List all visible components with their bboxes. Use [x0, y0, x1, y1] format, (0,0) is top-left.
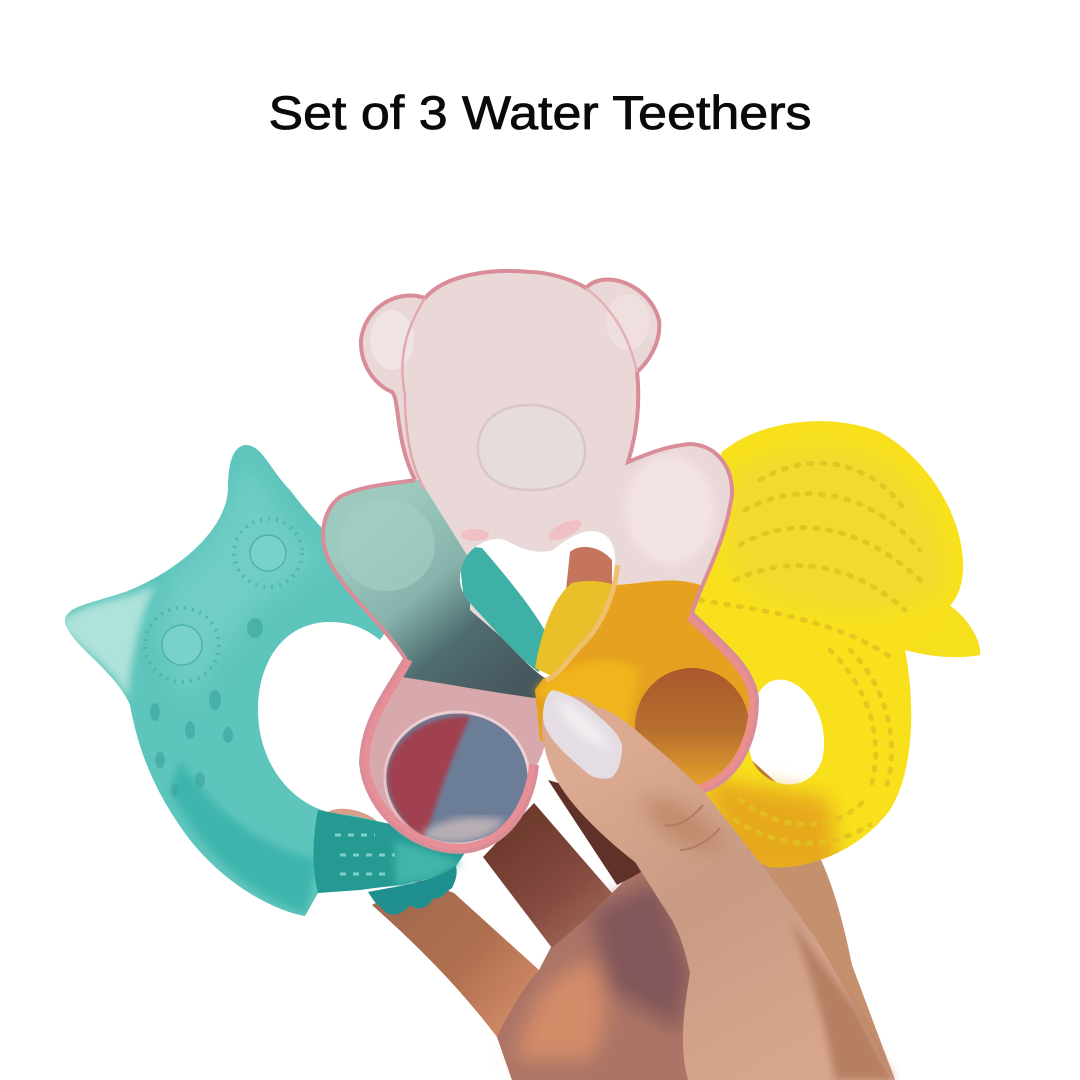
pink bear teether [300, 271, 770, 860]
teal owl teether [60, 445, 470, 916]
orange palm highlight [515, 960, 605, 1060]
nail highlight [556, 700, 612, 750]
brighter orange around the nail [532, 659, 639, 724]
embossed dots on duck [700, 463, 925, 843]
clear lens of right foot [635, 668, 749, 784]
first finger [372, 880, 600, 1080]
yellow duck edge visible through the heart [535, 581, 615, 680]
thumb [542, 696, 894, 1080]
scalloped fin [368, 866, 457, 914]
embossed band texture [335, 835, 395, 874]
embossed dots [150, 618, 263, 797]
embossed sun: top [234, 519, 302, 587]
right ear highlight [606, 294, 650, 350]
lower curved band [170, 760, 318, 913]
yellow duck teether [694, 421, 980, 868]
duck body [640, 421, 980, 867]
bear snout [478, 405, 585, 490]
ear highlights [370, 310, 414, 370]
left arm emboss [348, 511, 435, 591]
knuckle creases [665, 805, 720, 850]
fingertip behind teal band [328, 809, 378, 822]
duck beak [905, 606, 980, 657]
fingertip behind the heart [566, 547, 612, 590]
thumb with painted nail [542, 690, 894, 1080]
right back finger [760, 860, 895, 1080]
inner head line [402, 298, 425, 490]
owl body [65, 445, 470, 916]
heart-edge orange inner curve [545, 565, 615, 678]
red part of the lens [388, 716, 470, 838]
orange lower right [535, 580, 749, 785]
light right side of band [395, 840, 462, 885]
purple palm shadow [590, 880, 690, 1030]
right arm highlight [628, 458, 712, 562]
finger seen through duck hole [735, 745, 790, 810]
teal strip visible through the heart [458, 545, 550, 672]
second notch highlight [548, 520, 582, 540]
bear outline [323, 271, 757, 852]
clear lens of left foot [385, 712, 529, 844]
head shading [723, 445, 946, 612]
third finger [548, 780, 645, 885]
thick pink rim on the left foot [361, 658, 537, 852]
body highlight [162, 474, 312, 688]
thumb right-side shading [790, 920, 894, 1080]
thumb joint shadow [640, 798, 730, 853]
palm [497, 865, 720, 1080]
thick pink rim on the right foot [692, 613, 757, 793]
light left ear highlight [60, 585, 155, 700]
amber lower part of duck [700, 775, 840, 880]
darker teal band at bottom of ring [314, 810, 470, 893]
embossed sun: left [145, 608, 219, 682]
second finger [483, 803, 612, 948]
bear silhouette [323, 271, 757, 852]
hand: back fingers and palm [328, 547, 895, 1080]
left arm teal-gray [325, 480, 545, 698]
pale reflection in the lens [420, 817, 505, 843]
title: Set of 3 Water Teethers [268, 86, 812, 139]
painted nail [543, 690, 622, 779]
notch highlights under the head [461, 529, 489, 541]
inner head line right [586, 288, 637, 372]
lower foot base [369, 677, 544, 820]
